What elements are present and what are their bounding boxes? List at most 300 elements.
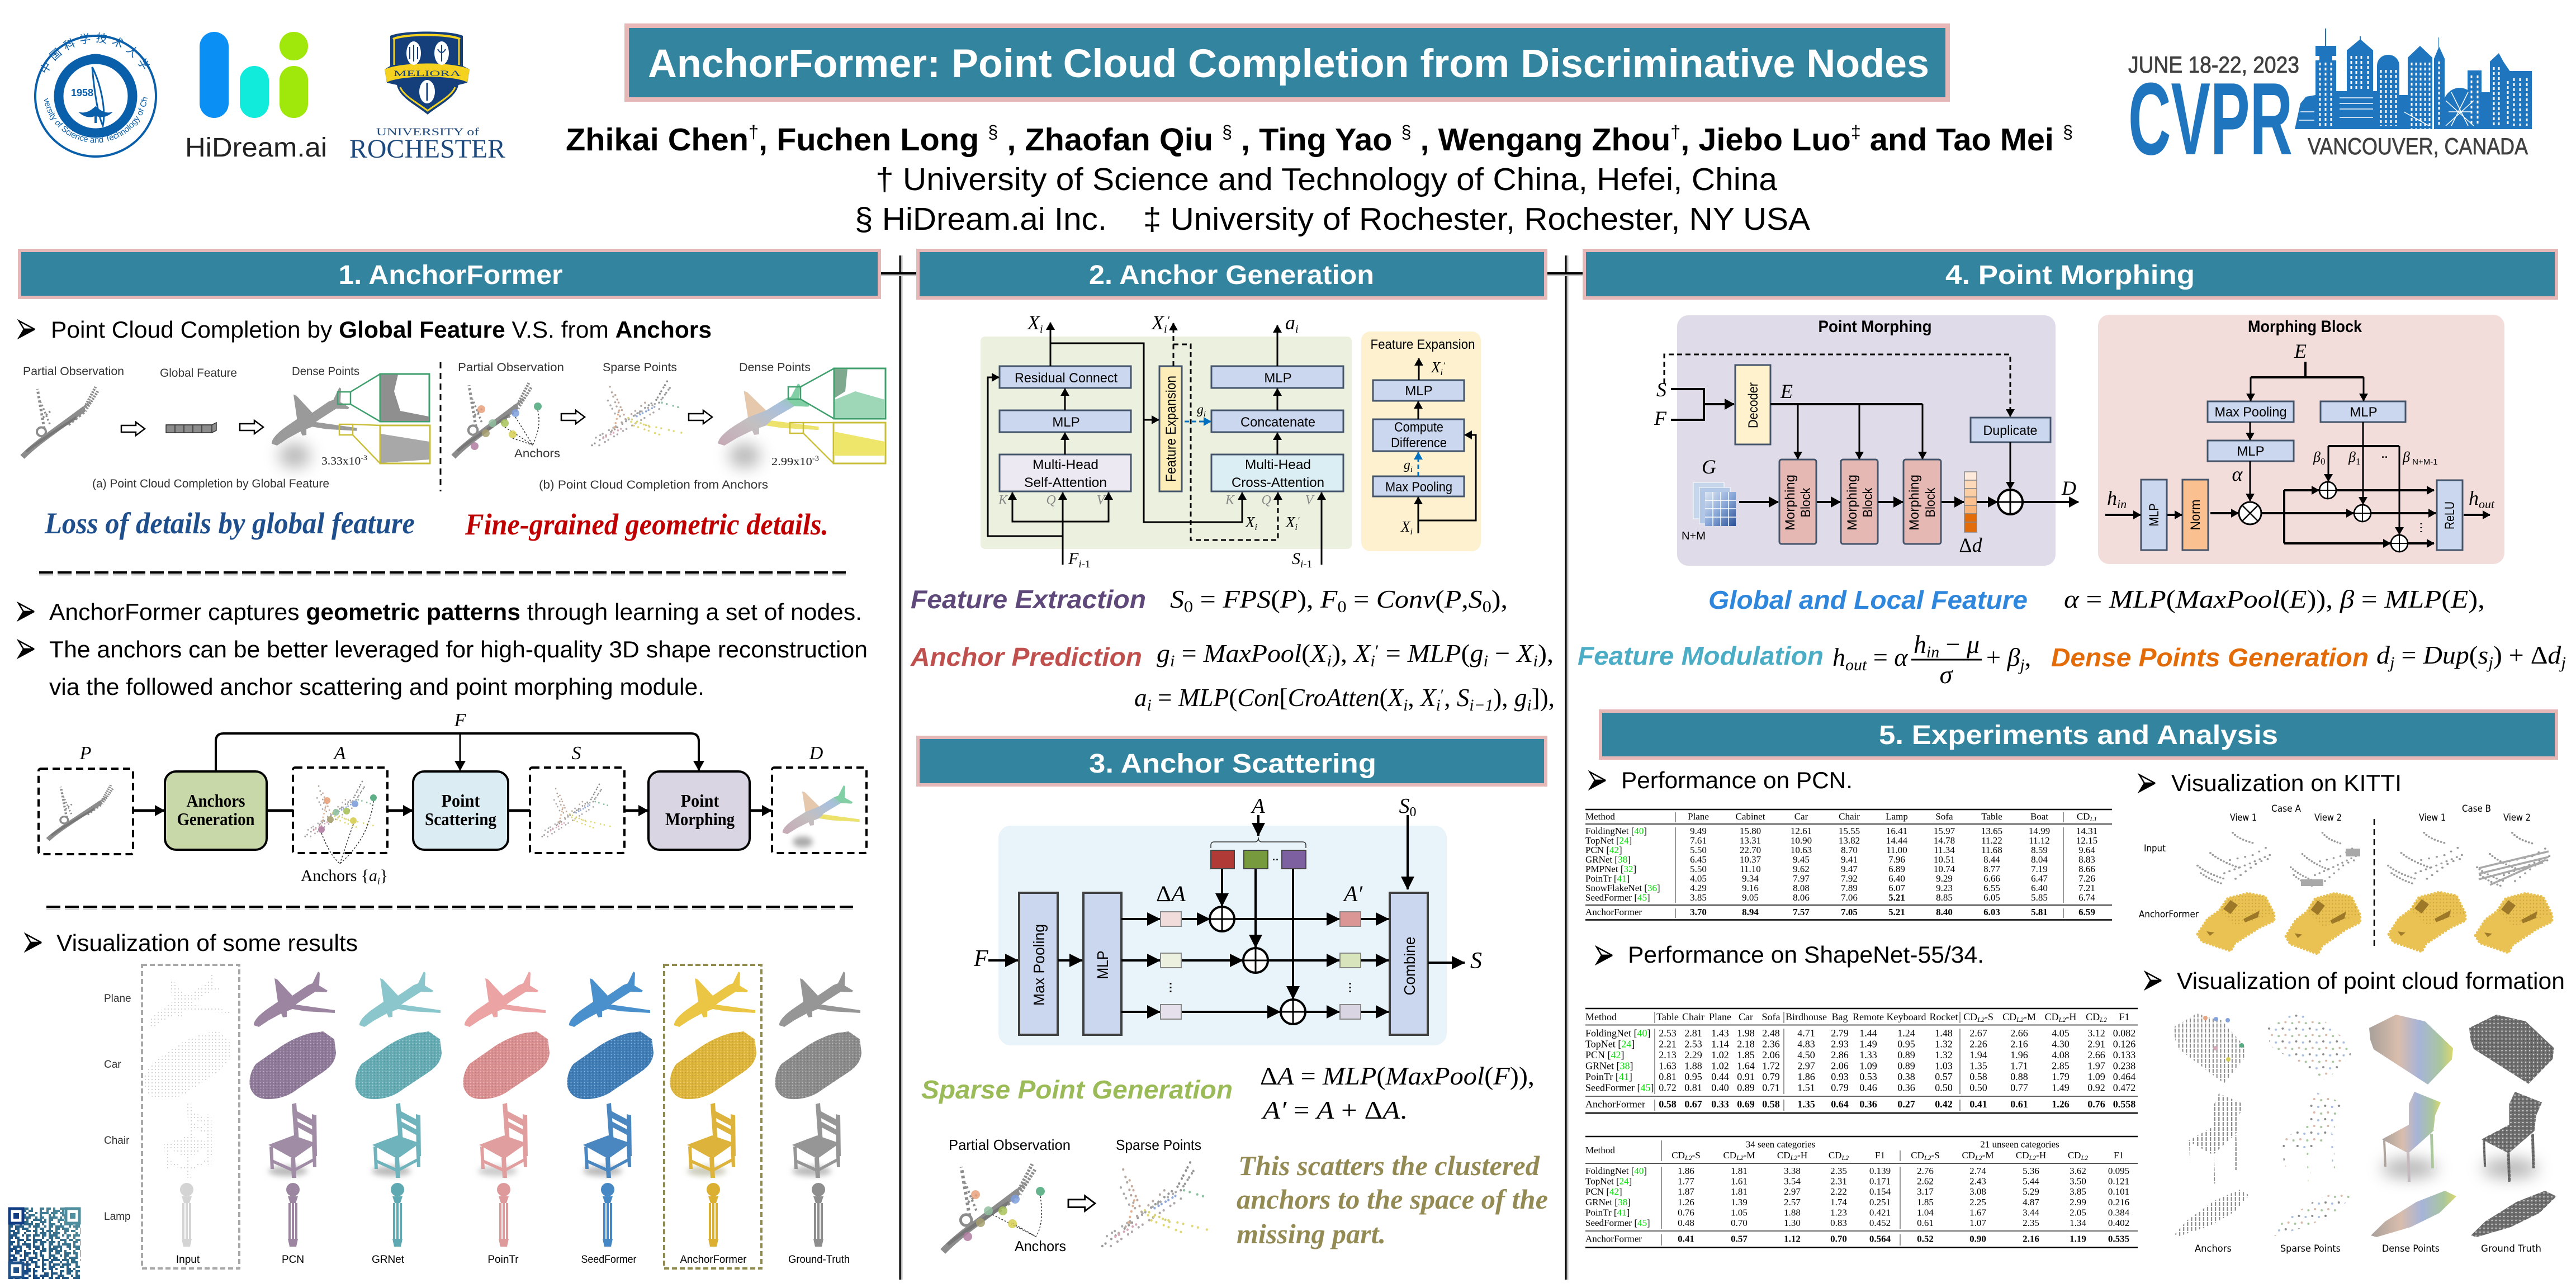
table: ShapeNet-55 results: 2.29 [1684, 1049, 1702, 1060]
table: ShapeNet-55 results: 0.46 [1859, 1082, 1877, 1093]
table: ShapeNet-34 results: 0.48 [1678, 1218, 1694, 1228]
authors: § [2063, 122, 2073, 142]
box: duplicate: Duplicate [1983, 423, 2037, 438]
diagram: feature expansion panel: X [1431, 359, 1440, 376]
table: ShapeNet-34 results: 0.57 [1731, 1233, 1748, 1244]
equation: feature modulation: h [1914, 630, 1926, 659]
figure: anchor completion: Sparse Points [603, 361, 677, 374]
table: ShapeNet-34 results: CD [1777, 1150, 1807, 1162]
diagram: anchor scattering [973, 794, 1482, 1045]
figure: KITTI cases: AnchorFormer [2139, 909, 2199, 920]
table: PCN results: 11.34 [1934, 845, 1955, 855]
box: max pooling [2208, 401, 2294, 422]
table: PCN results: 3.85 [1690, 892, 1707, 903]
equation: anchor prediction 1: i [1170, 652, 1175, 670]
table: ShapeNet-55 results: Bag [1831, 1011, 1848, 1022]
diagram: point morphing: F [1654, 407, 1667, 429]
table: ShapeNet-34 results: 3.54 [1784, 1176, 1801, 1186]
bullet: visualization of results: Visualization of some results [56, 930, 358, 956]
figure: partial observation to sparse points: Anchors [1015, 1238, 1066, 1254]
box: point morphing: Point [681, 790, 719, 811]
table: ShapeNet-55 results: 0.38 [1897, 1071, 1915, 1082]
table: ShapeNet-34 results: 2.25 [1969, 1197, 1986, 1208]
table: ShapeNet-55 results: PCN [42] [1585, 1049, 1625, 1060]
equation: feature extraction: ), [1491, 585, 1508, 613]
box: MLP right [2321, 401, 2405, 422]
callout: fine-grained details: Fine-grained geometric details. [465, 508, 828, 541]
table: ShapeNet-55 results: 2.66 [2010, 1027, 2028, 1039]
table: ShapeNet-55 results: GRNet [38] [1585, 1060, 1633, 1071]
table: ShapeNet-34 results: CD [2016, 1150, 2046, 1162]
boxes: morphing blocks: Block [1798, 487, 1813, 518]
table: PCN results: SeedFormer [45] [1585, 892, 1650, 903]
table: ShapeNet-55 results: 0.88 [2010, 1071, 2028, 1082]
equation: feature extraction: 0 [1483, 598, 1491, 616]
equation: dense points: ) + Δ [2493, 641, 2547, 669]
table: ShapeNet-34 results: 1.19 [2070, 1233, 2086, 1244]
table: PCN results: 13.65 [1981, 826, 2002, 836]
table: ShapeNet-55 results: 0.95 [1684, 1071, 1702, 1082]
table: PCN results: 13.82 [1839, 835, 1860, 846]
table: ShapeNet-55 results: 4.50 [1797, 1049, 1815, 1060]
table: ShapeNet-34 results: 3.62 [2070, 1166, 2086, 1176]
figure: partial observation to sparse points: Sparse Points [1116, 1137, 1201, 1153]
table: PCN results: 8.70 [1841, 845, 1858, 855]
diagram: anchor scattering: S [1470, 948, 1482, 974]
table: PCN results: 6.05 [1983, 892, 2000, 903]
equation: anchor prediction 2: a [1134, 683, 1147, 712]
table: PCN results: 6.59 [2078, 907, 2095, 917]
table: PCN results: 4.05 [1690, 873, 1707, 884]
table: ShapeNet-55 results: Keyboard [1887, 1011, 1926, 1022]
diagram: anchor generator block: i-1 [1300, 558, 1312, 570]
callout: scatter explanation: This scatters the clustered [1238, 1150, 1540, 1181]
diagram: point morphing: E [1780, 380, 1793, 402]
heading: section 5: 5. Experiments and Analysis [1879, 721, 2278, 750]
table: ShapeNet-55 results: 0.77 [2010, 1082, 2028, 1093]
table: ShapeNet-55 results: 0.126 [2113, 1039, 2135, 1050]
table: ShapeNet-55 results: CD [2002, 1011, 2036, 1024]
table: ShapeNet-55 results: 0.238 [2113, 1060, 2135, 1071]
equation: feature modulation: out [1845, 656, 1867, 674]
table: PCN results: FoldingNet [40] [1585, 826, 1647, 836]
table: ShapeNet-55 results: 1.71 [2010, 1060, 2028, 1071]
table: PCN results: 9.23 [1936, 883, 1953, 893]
box: MLP right: MLP [1264, 371, 1292, 386]
table: ShapeNet-34 results: 0.76 [1678, 1208, 1694, 1218]
table: PCN results: 9.34 [1742, 873, 1759, 884]
table: PCN results: 7.97 [1793, 873, 1810, 884]
table: ShapeNet-34 results: 1.81 [1731, 1186, 1748, 1197]
table: ShapeNet-34 results: 0.171 [1869, 1176, 1891, 1186]
diagram: anchor scattering: F [973, 946, 988, 972]
figure: global feature completion: Global Feature [160, 367, 237, 380]
equation: anchor prediction 1: = [1379, 639, 1408, 667]
title banner [627, 26, 1948, 100]
row: lamps [180, 1183, 825, 1247]
diagram: anchor generator block [981, 311, 1352, 570]
logo: University of Science and Technology of China: 中国科学技术大学 [40, 32, 150, 73]
table: ShapeNet-34 results: 2.35 [2023, 1218, 2039, 1228]
equation: feature modulation: h [1832, 643, 1845, 671]
table: ShapeNet-55 results: 1.44 [1859, 1027, 1877, 1039]
table: ShapeNet-34 results: 0.535 [2108, 1233, 2129, 1244]
diagram: morphing block: N+M-1 [2410, 457, 2438, 467]
equation: anchor prediction 1: i [1483, 652, 1488, 670]
equation: dense points: j [2486, 654, 2493, 672]
labels: formation stages [2195, 1243, 2541, 1254]
table: ShapeNet-55 results: 0.50 [1969, 1082, 1987, 1093]
figure: anchor completion: -3 [812, 454, 819, 462]
table: PCN results: 8.08 [1793, 883, 1810, 893]
table: PCN results: TopNet [24] [1585, 835, 1632, 846]
diagram: morphing block: h [2469, 487, 2479, 509]
bullet: geometric patterns: AnchorFormer captures geometric patterns through learning a set of nodes. [49, 599, 862, 625]
table: PCN results: 14.31 [2076, 826, 2097, 836]
diagram: anchor generator block: ′ [1167, 314, 1170, 326]
equation: feature modulation: μ [1967, 630, 1980, 659]
label: feature extraction: Feature Extraction [911, 585, 1146, 614]
box: anchors generation: Generation [177, 809, 255, 829]
heading: section 3 [918, 737, 1546, 785]
table: ShapeNet-55 results: 2.26 [1969, 1039, 1987, 1050]
table: ShapeNet-34 results: 3.38 [1784, 1166, 1801, 1176]
row: sofa [2174, 1014, 2554, 1085]
table: ShapeNet-34 results: CD [1723, 1150, 1755, 1162]
table: PCN results: 8.59 [2031, 845, 2048, 855]
logo: HiDream.ai [185, 32, 327, 163]
diagram: point morphing: G [1702, 456, 1716, 478]
box: combine: Combine [1401, 937, 1418, 995]
panel: 3. Anchor Scattering [918, 737, 1548, 1254]
bullet: visualization on KITTI: Visualization on KITTI [2171, 770, 2402, 796]
table: ShapeNet-55 results: 1.02 [1711, 1049, 1729, 1060]
table: ShapeNet-34 results: 2.16 [2023, 1233, 2039, 1244]
diagram: point morphing: Point Morphing [1818, 318, 1932, 336]
table: PCN results: 7.61 [1690, 835, 1707, 846]
table: ShapeNet-34 results: 3.50 [2070, 1176, 2086, 1186]
diagram: morphing block: α [2232, 463, 2243, 485]
table: PCN results: L1 [2089, 815, 2097, 823]
table: PCN results: 8.44 [1983, 854, 2000, 865]
equation: anchor prediction 1: = [1175, 639, 1204, 667]
diagram: anchor generator block: X [1152, 311, 1164, 334]
table: ShapeNet-34 results: CD [2068, 1150, 2088, 1162]
labels: formation stages: Anchors [2195, 1243, 2232, 1254]
table: ShapeNet-55 results: 1.24 [1897, 1027, 1915, 1039]
heading: section 5 [1600, 711, 2556, 758]
table: ShapeNet-55 results: 0.71 [1762, 1082, 1780, 1093]
boxes: morphing blocks: Morphing [1907, 475, 1922, 531]
diagram: anchor generator block: F [1068, 550, 1078, 568]
table: ShapeNet-34 results: 0.139 [1869, 1166, 1891, 1176]
heading: section 3: 3. Anchor Scattering [1089, 749, 1376, 779]
equation: feature extraction: FPS(P), F [1223, 585, 1336, 613]
table: PCN results: Method [1585, 811, 1615, 822]
table: ShapeNet-34 results: -M [1982, 1150, 1994, 1161]
table: ShapeNet-55 results: TopNet [24] [1585, 1039, 1635, 1050]
table: ShapeNet-55 results: 2.06 [1831, 1060, 1849, 1071]
box: max pooling: Max Pooling [1030, 924, 1048, 1006]
diagram: anchor generator block: i [1295, 523, 1298, 532]
table: ShapeNet-34 results: CD [1911, 1150, 1940, 1162]
table: ShapeNet-34 results: 0.41 [1678, 1233, 1694, 1244]
table: ShapeNet-34 results: 0.83 [1830, 1218, 1847, 1228]
table: PCN results: 7.05 [1841, 907, 1858, 917]
authors: , Ting Yao [1232, 122, 1401, 158]
table: ShapeNet-34 results: 1.12 [1784, 1233, 1801, 1244]
table: ShapeNet-55 results: 1.43 [1711, 1027, 1729, 1039]
table: ShapeNet-55 results: Method [1585, 1011, 1617, 1022]
table: ShapeNet-34 results: 0.251 [1869, 1197, 1891, 1208]
table: ShapeNet-55 results: Sofa [1762, 1011, 1781, 1022]
table: ShapeNet-34 results: 1.30 [1784, 1218, 1801, 1228]
table: ShapeNet-34 results: 2.57 [1784, 1197, 1801, 1208]
label: dense points generation: Dense Points Generation [2051, 643, 2369, 672]
table: PCN results: 8.83 [2078, 854, 2095, 865]
table: ShapeNet-34 results: -S [1692, 1150, 1701, 1161]
heading: section 2: 2. Anchor Generation [1089, 261, 1374, 290]
table: PCN results: Plane [1688, 811, 1709, 822]
table: ShapeNet-55 results: AnchorFormer [1585, 1098, 1645, 1110]
table: ShapeNet-34 results: L2 [1789, 1154, 1797, 1162]
table: ShapeNet-55 results: 1.48 [1935, 1027, 1953, 1039]
equation: anchor prediction 2: i [1436, 696, 1441, 714]
figure: anchor completion: Partial Observation [458, 361, 564, 374]
table: ShapeNet-55 results: 0.67 [1684, 1098, 1702, 1110]
table: ShapeNet-55 results: 0.58 [1762, 1098, 1780, 1110]
table: ShapeNet-55 results: 0.81 [1684, 1082, 1702, 1093]
table: ShapeNet-34 results: 1.07 [1969, 1218, 1986, 1228]
table: PCN results: 8.04 [2031, 854, 2048, 865]
table: ShapeNet-55 results: 2.85 [2052, 1060, 2070, 1071]
equation: scattered anchors: A′ = A + ΔA. [1261, 1096, 1407, 1124]
table: ShapeNet-34 results: 4.87 [2023, 1197, 2039, 1208]
heading: section 1: 1. AnchorFormer [339, 261, 562, 290]
box: cross attention [1211, 454, 1343, 491]
table: ShapeNet-34 results: FoldingNet [40] [1585, 1166, 1647, 1176]
equation: anchor prediction 2: , [1444, 683, 1457, 712]
table: PCN results: 8.40 [1936, 907, 1953, 917]
table: ShapeNet-55 results: 1.97 [2087, 1060, 2105, 1071]
diagram: pipeline: D [809, 743, 823, 764]
table: ShapeNet-34 results: 0.70 [1830, 1233, 1847, 1244]
label: global and local feature: Global and Local Feature [1708, 585, 2028, 614]
table: ShapeNet-55 results: 2.67 [1969, 1027, 1987, 1039]
table: PCN results: 14.44 [1886, 835, 1908, 846]
diagram: anchor generator block: g [1197, 402, 1204, 417]
column labels: Input [176, 1254, 200, 1266]
table: ShapeNet-55 results: 0.61 [2010, 1098, 2028, 1110]
table: PCN results: 6.45 [1690, 854, 1707, 865]
equation: feature extraction: Conv(P,S [1376, 585, 1481, 613]
label: feature modulation: Feature Modulation [1578, 641, 1824, 670]
table: PCN results: 6.66 [1983, 873, 2000, 884]
heading: section 4: 4. Point Morphing [1945, 261, 2195, 290]
table: ShapeNet-34 results: CD [1829, 1150, 1849, 1162]
table: PCN results: 8.85 [1936, 892, 1953, 903]
diagram: morphing block: β [2348, 449, 2356, 465]
equation: feature modulation: = [1867, 643, 1894, 671]
table: ShapeNet-34 results: CD [1671, 1150, 1701, 1162]
logo: University of Rochester [349, 31, 505, 164]
diagram: feature expansion panel: X [1401, 518, 1410, 535]
table: ShapeNet-55 results: L2 [2016, 1016, 2024, 1024]
box: max pooling [1019, 893, 1058, 1035]
table: ShapeNet-55 results: 0.79 [1831, 1082, 1849, 1093]
figure: partial observation to sparse points [943, 1137, 1207, 1254]
box: anchors generation: Anchors [187, 790, 245, 811]
diagram: feature expansion panel: g [1404, 458, 1410, 472]
table: ShapeNet-34 results: 3.08 [1969, 1186, 1986, 1197]
label: anchor prediction: Anchor Prediction [910, 642, 1142, 671]
figure: KITTI cases [2139, 803, 2554, 954]
diagram: pipeline: Anchors {a [301, 866, 377, 885]
table: ShapeNet-55 results: 1.86 [1797, 1071, 1815, 1082]
table: ShapeNet-55 results: 2.97 [1797, 1060, 1815, 1071]
table: ShapeNet-34 results: CD [1962, 1150, 1994, 1162]
table: PCN results: 10.63 [1791, 845, 1812, 855]
table: ShapeNet-55 results: 1.64 [1737, 1060, 1755, 1071]
table: ShapeNet-55 results: 2.36 [1762, 1039, 1780, 1050]
table: PCN results: 11.68 [1981, 845, 2002, 855]
table: PCN results: AnchorFormer [1585, 907, 1642, 917]
diagram: anchor generator block: X [1027, 311, 1040, 334]
logo: University of Rochester: MELIORA [394, 69, 461, 78]
table: ShapeNet-55 results: 0.69 [1737, 1098, 1755, 1110]
table: ShapeNet-34 results: 1.67 [1969, 1208, 1986, 1218]
table: ShapeNet-34 results: 1.26 [1678, 1197, 1694, 1208]
diagram: anchor generator block: i-1 [1078, 558, 1090, 570]
table: ShapeNet-55 results: -S [1985, 1011, 1993, 1022]
table: ShapeNet-55 results: 0.76 [2087, 1098, 2105, 1110]
table: ShapeNet-55 results: Rocket [1930, 1011, 1958, 1022]
box: self attention: Self-Attention [1024, 475, 1107, 490]
table: ShapeNet-55 results: 2.06 [1762, 1049, 1780, 1060]
panel: 2. Anchor Generation [910, 250, 1555, 714]
table: ShapeNet-34 results: 1.86 [1678, 1166, 1694, 1176]
figure: KITTI cases: View 1 [2419, 812, 2446, 823]
table: ShapeNet-55 results: 0.92 [2087, 1082, 2105, 1093]
equation: feature modulation: − [1939, 630, 1967, 659]
figure: KITTI cases: View 1 [2230, 812, 2257, 823]
column labels: SeedFormer [581, 1254, 637, 1266]
table: ShapeNet-55 results: 2.91 [2087, 1039, 2105, 1050]
box: MLP left: MLP [1052, 415, 1080, 430]
table: ShapeNet-34 results: 0.421 [1869, 1208, 1891, 1218]
box: cross attention: Cross-Attention [1232, 475, 1324, 490]
diagram: anchor generator block: i [1164, 323, 1167, 335]
table: PCN results: 6.89 [1888, 864, 1905, 874]
table: ShapeNet-55 results: 1.32 [1935, 1039, 1953, 1050]
table: ShapeNet-55 results: -H [2066, 1011, 2076, 1022]
table: ShapeNet-34 results: 3.44 [2023, 1208, 2039, 1218]
figure: anchor completion: Anchors [514, 447, 560, 460]
box: self attention [1000, 454, 1131, 491]
table: ShapeNet-55 results: 0.57 [1935, 1071, 1953, 1082]
box: MLP: MLP [1094, 950, 1111, 979]
table: ShapeNet-34 results: L2 [1841, 1154, 1849, 1162]
table: ShapeNet-34 results: 0.402 [2108, 1218, 2129, 1228]
table: ShapeNet-55 results: 1.98 [1737, 1027, 1755, 1039]
equation: anchor prediction 1: X [1354, 639, 1370, 667]
table: ShapeNet-55 results: 0.93 [1831, 1071, 1849, 1082]
table: PCN results: 7.92 [1841, 873, 1858, 884]
table: ShapeNet-55 results: 1.33 [1859, 1049, 1877, 1060]
panel: 4. Point Morphing [1578, 250, 2566, 689]
figure: anchor completion [453, 361, 886, 491]
diagram: pipeline: S [571, 743, 581, 764]
table: ShapeNet-34 results: -H [2036, 1150, 2046, 1161]
table: ShapeNet-34 results [1585, 1137, 2138, 1248]
table: ShapeNet-34 results: PCN [42] [1585, 1186, 1622, 1197]
diagram: pipeline [39, 710, 866, 887]
equation: anchor prediction 2: i [1527, 696, 1532, 714]
table: PCN results: PMPNet [32] [1585, 864, 1636, 874]
table: ShapeNet-55 results: 2.93 [1831, 1039, 1849, 1050]
figure: global feature completion [22, 365, 430, 490]
authors: ‡ [1851, 122, 1861, 142]
table: ShapeNet-55 results: 1.49 [2052, 1082, 2070, 1093]
table: ShapeNet-34 results: 1.61 [1731, 1176, 1748, 1186]
table: PCN results: PoinTr [41] [1585, 873, 1630, 884]
table: PCN results: 9.41 [1841, 854, 1858, 865]
table: PCN results: 5.50 [1690, 845, 1707, 855]
equation: anchor prediction 2: MLP(Con[CroAtten(X [1178, 683, 1404, 712]
table: PCN results: Cabinet [1736, 811, 1765, 822]
equation: feature modulation: , [2025, 643, 2031, 671]
table: PCN results: 13.31 [1740, 835, 1761, 846]
table: ShapeNet-55 results: 0.133 [2113, 1049, 2135, 1060]
table: PCN results: 7.89 [1841, 883, 1858, 893]
table: ShapeNet-55 results: 0.95 [1897, 1039, 1915, 1050]
equation: feature extraction: = [1347, 585, 1376, 613]
table: ShapeNet-55 results: 1.85 [1737, 1049, 1755, 1060]
table: PCN results: 7.96 [1888, 854, 1905, 865]
table: ShapeNet-55 results: 1.88 [1684, 1060, 1702, 1071]
table: ShapeNet-34 results: 34 seen categories [1746, 1139, 1815, 1149]
box: ReLU: ReLU [2442, 501, 2457, 529]
table: PCN results: Boat [2030, 811, 2048, 822]
table: ShapeNet-55 results: 1.26 [2052, 1098, 2070, 1110]
figure: KITTI cases: View 2 [2503, 812, 2531, 823]
authors: Zhikai Chen [566, 122, 746, 158]
table: ShapeNet-55 results: Chair [1682, 1011, 1704, 1022]
table: ShapeNet-55 results: PoinTr [41] [1585, 1071, 1632, 1082]
table: ShapeNet-34 results: L2 [2028, 1154, 2036, 1162]
box: feature expansion [1159, 366, 1182, 491]
icon: grid G [1693, 482, 1736, 526]
logo: University of Rochester: UNIVERSITY of [376, 126, 480, 138]
table: ShapeNet-55 results: 1.72 [1762, 1060, 1780, 1071]
table: PCN results: 16.41 [1886, 826, 1907, 836]
table: ShapeNet-55 results: 1.51 [1797, 1082, 1815, 1093]
equation: feature extraction: 0 [1184, 598, 1193, 616]
column labels: Ground-Truth [788, 1254, 850, 1266]
diagram: pipeline: P [79, 743, 91, 764]
equation: anchor prediction 2: S [1457, 683, 1470, 712]
table: ShapeNet-55 results: 1.49 [1859, 1039, 1877, 1050]
equation: anchor prediction 2: , [1408, 683, 1420, 712]
table: ShapeNet-55 results: 1.02 [1711, 1060, 1729, 1071]
figure: global feature completion: Dense Points [292, 365, 359, 378]
table: ShapeNet-34 results: 1.74 [1830, 1197, 1847, 1208]
diagram: morphing block: 0 [2321, 456, 2325, 467]
box: point scattering: Point [442, 790, 480, 811]
diagram: anchor generator block: a [1285, 311, 1295, 334]
bullet: completion comparison: Point Cloud Completion by Global Feature V.S. from Anchors [51, 316, 712, 343]
table: PCN results: Lamp [1886, 811, 1908, 822]
